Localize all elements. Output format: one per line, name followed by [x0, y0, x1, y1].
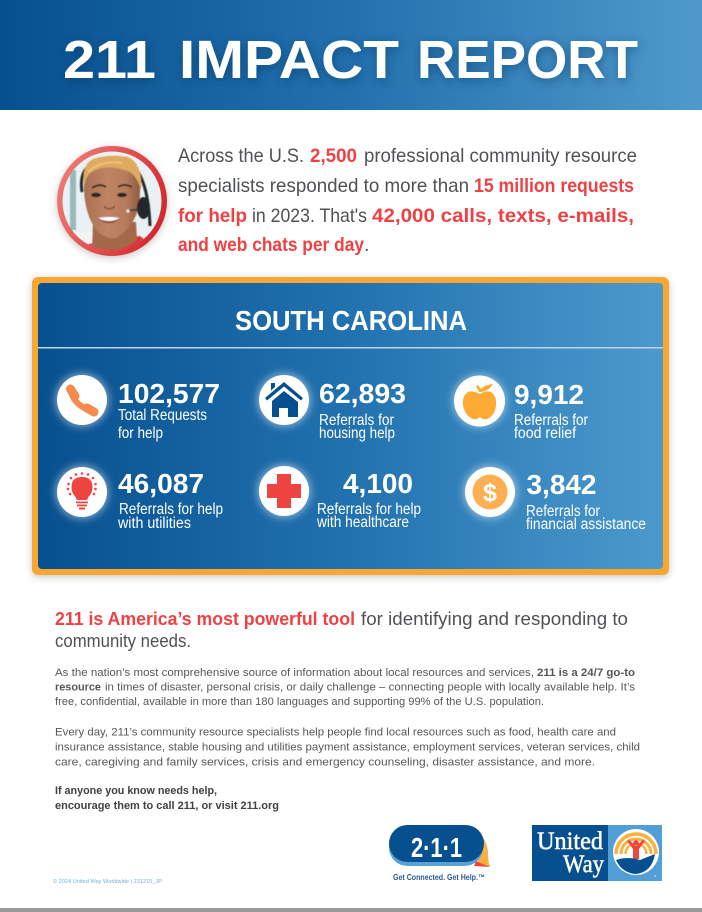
portrait photo of specialist [57, 146, 167, 262]
stat: total requests [55, 373, 220, 442]
title: 211 [63, 30, 156, 90]
intro paragraph: 42,000 calls, texts, e-mails, [372, 205, 634, 227]
stat: financial assistance [463, 465, 646, 533]
intro paragraph: Across the U.S. [178, 145, 304, 167]
icon: dollar coin: $ [483, 479, 497, 507]
body paragraph 2 [55, 726, 640, 768]
body paragraph 1: As the nation’s most comprehensive source of information about local resources and services, [55, 667, 534, 679]
panel heading: SOUTH CAROLINA [235, 305, 467, 336]
intro paragraph: in 2023. That's [252, 205, 367, 227]
stat: housing: 62,893 [319, 378, 406, 409]
stat: financial assistance: 3,842 [526, 469, 596, 500]
stat: housing: housing help [319, 425, 395, 442]
211 logo [389, 825, 490, 882]
call to action: If anyone you know needs help, [55, 785, 217, 797]
stat: food: 9,912 [514, 379, 584, 410]
icon: house [265, 382, 303, 417]
stat: food: food relief [514, 425, 577, 442]
icon: phone [70, 389, 94, 412]
stat: utilities [55, 465, 223, 532]
bottom edge [0, 908, 702, 912]
panel: South Carolina statistics [32, 277, 669, 575]
stat: total requests: 102,577 [118, 378, 220, 409]
stat: total requests: Total Requests [118, 407, 207, 424]
211 logo: Get Connected. Get Help.™ [393, 873, 485, 882]
intro paragraph: 15 million requests [474, 175, 634, 197]
stat: utilities: 46,087 [118, 468, 204, 499]
stat: food [452, 374, 588, 442]
subheading: for identifying and responding to [361, 609, 628, 629]
stat: total requests: for help [118, 425, 163, 442]
intro paragraph [178, 145, 637, 256]
title: IMPACT [179, 30, 399, 90]
stat: utilities: Referrals for help [119, 501, 223, 518]
stat: housing [257, 373, 406, 442]
icon: light bulb [67, 472, 97, 510]
United Way logo: United [537, 828, 603, 855]
stat: healthcare: Referrals for help [317, 501, 421, 518]
intro paragraph: 2,500 [310, 145, 357, 167]
stat: healthcare [257, 464, 421, 531]
stat: food: Referrals for [514, 412, 588, 429]
211 logo: 2·1·1 [411, 832, 462, 863]
body paragraph 1: free, confidential, available in more than 180 languages and supporting 99% of the U.S. population. [55, 696, 544, 708]
intro paragraph: for help [178, 205, 247, 227]
stat: utilities: with utilities [117, 515, 191, 532]
stat: healthcare: with healthcare [316, 514, 409, 531]
call to action: encourage them to call 211, or visit 211.org [55, 800, 279, 812]
stat: financial assistance: Referrals for [526, 503, 600, 520]
intro paragraph: professional community resource [364, 145, 637, 167]
icon: dollar coin [472, 474, 508, 510]
body paragraph 1: resource [55, 682, 101, 694]
body paragraph 1 [55, 667, 636, 708]
United Way logo [532, 825, 662, 881]
United Way logo: Way [563, 851, 604, 878]
subheading: 211 is America’s most powerful tool [55, 609, 355, 629]
copyright footer: © 2024 United Way Worldwide | 231215_JP [53, 878, 162, 885]
title [63, 30, 638, 90]
subheading: community needs. [55, 631, 191, 651]
intro paragraph: and web chats per day [178, 234, 364, 256]
title: REPORT [417, 30, 638, 90]
icon: medical cross [267, 474, 301, 508]
body paragraph 2: care, caregiving and family services, crisis and emergency counseling, disaster assistance, and more. [55, 756, 595, 768]
body paragraph 1: in times of disaster, personal crisis, or daily challenge – connecting people with locally available help. It’s [105, 682, 636, 694]
body paragraph 2: insurance assistance, stable housing and utilities payment assistance, employment services, veteran services, child [55, 742, 640, 754]
body paragraph 2: Every day, 211’s community resource specialists help people find local resources such as food, health care and [55, 726, 616, 738]
intro paragraph: . [364, 234, 369, 256]
stat: healthcare: 4,100 [343, 468, 413, 499]
call to action [55, 785, 279, 812]
subheading [55, 609, 628, 651]
stat: financial assistance: financial assistance [526, 516, 646, 533]
header banner [0, 0, 702, 110]
stat: housing: Referrals for [319, 412, 394, 429]
body paragraph 1: 211 is a 24/7 go-to [537, 667, 635, 679]
intro paragraph: specialists responded to more than [178, 175, 469, 197]
icon: apple [463, 384, 496, 419]
